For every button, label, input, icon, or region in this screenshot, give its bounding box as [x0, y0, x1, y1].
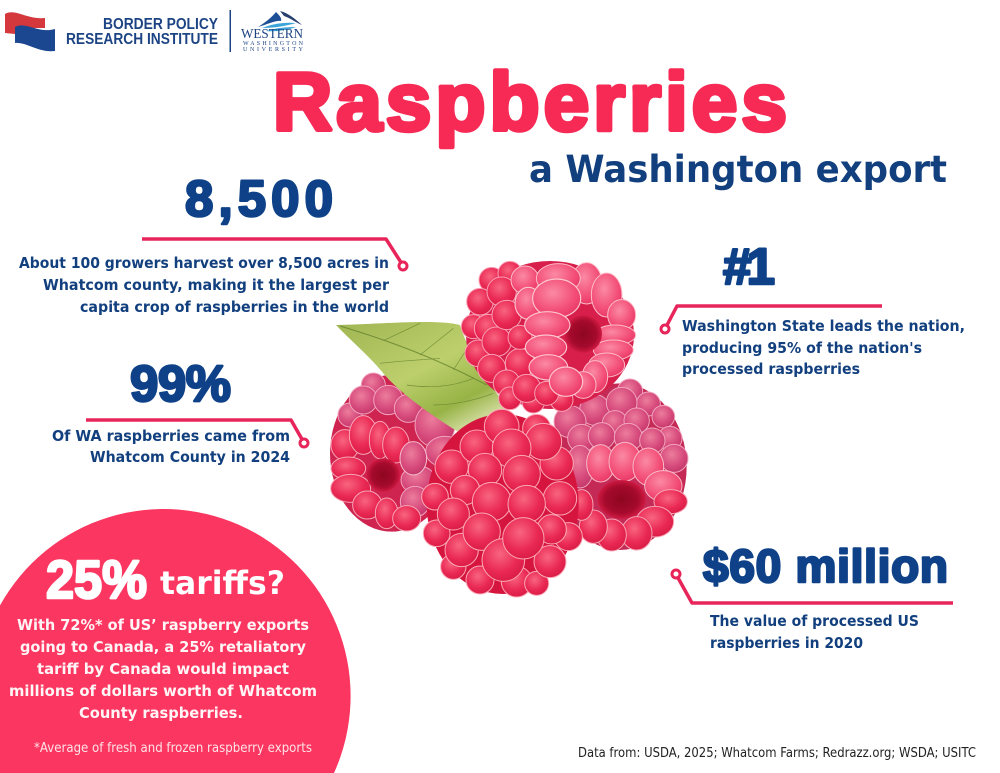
description	[19, 254, 390, 316]
university name: UNIVERSITY	[243, 47, 304, 53]
university name: WASHINGTON	[243, 41, 304, 47]
icon: mountain and waves	[258, 11, 302, 31]
title: Raspberries	[273, 57, 787, 148]
green leaf	[336, 322, 508, 435]
heading: tariffs?: tariffs?	[160, 564, 285, 602]
left raspberry	[330, 373, 464, 532]
panel: tariff callout circle	[0, 509, 351, 773]
description: Of WA raspberries came from	[52, 427, 290, 445]
front raspberry	[422, 409, 582, 597]
stat: 99%	[52, 355, 308, 466]
description	[52, 427, 290, 466]
illustration: raspberries and leaf	[330, 261, 688, 597]
description: Whatcom County in 2024	[90, 448, 290, 466]
description: capita crop of raspberries in the world	[80, 298, 389, 316]
icon: red and blue flag	[5, 12, 55, 51]
organisation name: RESEARCH INSTITUTE	[66, 31, 218, 48]
number: #1	[723, 238, 775, 295]
description: Washington State leads the nation,	[682, 317, 965, 335]
callout body text	[9, 616, 317, 722]
university name	[241, 26, 304, 53]
description: raspberries in 2020	[710, 634, 863, 652]
logo: Western Washington University	[241, 11, 304, 53]
callout body text: going to Canada, a 25% retaliatory	[20, 638, 306, 656]
logo: Border Policy Research Institute	[5, 10, 231, 52]
organisation name: BORDER POLICY	[103, 16, 219, 33]
description: processed raspberries	[682, 360, 860, 378]
callout body text: tariff by Canada would impact	[37, 660, 289, 678]
stat: $60 million	[672, 540, 953, 652]
stat: 8,500 acres	[19, 170, 407, 316]
description: Whatcom county, making it the largest per	[43, 276, 390, 294]
connector line	[86, 420, 308, 447]
subtitle: a Washington export	[529, 148, 947, 191]
university name: WESTERN	[241, 26, 303, 41]
footnote: *Average of fresh and frozen raspberry exports	[34, 741, 312, 756]
callout body text: County raspberries.	[79, 704, 243, 722]
description: About 100 growers harvest over 8,500 acres in	[19, 254, 389, 272]
description	[710, 612, 919, 652]
number: 8,500	[185, 170, 333, 227]
number: 99%	[130, 355, 231, 412]
connector line	[672, 570, 953, 603]
number: $60 million	[703, 540, 948, 592]
callout body text: With 72%* of US’ raspberry exports	[17, 616, 309, 634]
description: The value of processed US	[710, 612, 919, 630]
top raspberry	[461, 261, 636, 413]
description: producing 95% of the nation's	[682, 339, 922, 357]
description	[682, 317, 965, 378]
organisation name	[66, 16, 219, 48]
connector line	[142, 239, 407, 270]
connector line	[661, 306, 882, 333]
stat: #1	[661, 238, 965, 378]
callout body text: millions of dollars worth of Whatcom	[9, 682, 317, 700]
heading: 25%: 25%	[46, 550, 147, 610]
right raspberry	[553, 379, 688, 551]
